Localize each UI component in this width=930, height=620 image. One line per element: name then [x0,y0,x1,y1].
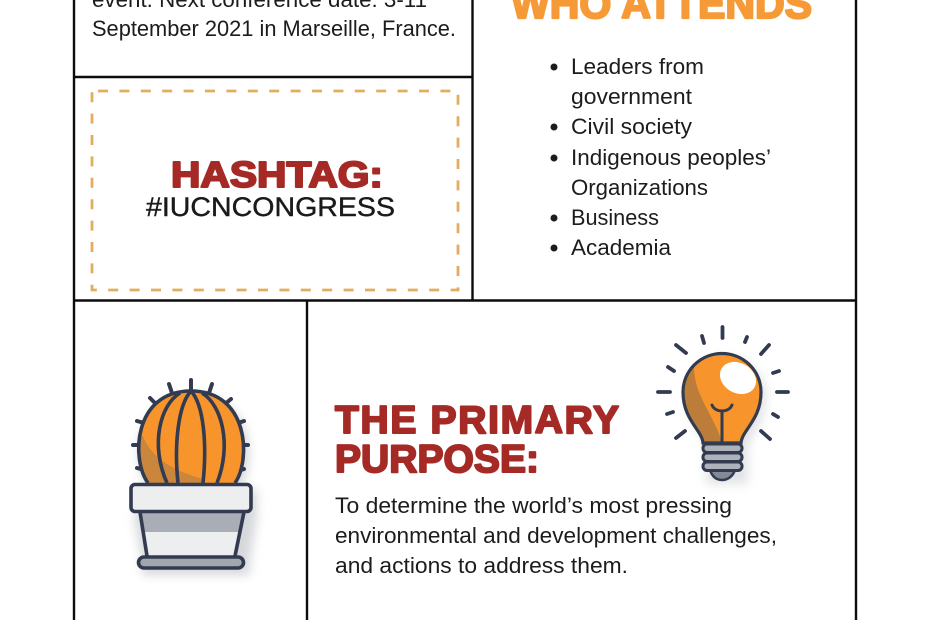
list: attendees: Business [571,205,659,230]
text block: purpose description: and actions to address them. [335,553,628,578]
heading: the primary purpose [335,399,619,481]
list: attendees: Leaders from [571,54,704,79]
text block: event date: September 2021 in Marseille, France. [92,16,456,41]
heading: hashtag: HASHTAG: [171,154,383,195]
text block: event date [92,0,456,41]
list: attendees: Organizations [571,175,708,200]
text block: purpose description [335,493,777,578]
icon: cactus [130,380,257,575]
text: hashtag value: #IUCNCONGRESS [146,192,395,222]
text block: purpose description: To determine the world’s most pressing [335,493,732,518]
list: attendees [550,54,771,260]
dashed frame [92,91,458,290]
icon: light bulb [658,327,788,484]
list: attendees: Academia [571,235,672,260]
heading: the primary purpose: PURPOSE: [335,438,539,481]
heading: the primary purpose: THE PRIMARY [335,399,619,442]
list: attendees: government [571,84,692,109]
text block: purpose description: environmental and development challenges, [335,523,777,548]
list: attendees: Civil society [571,114,692,139]
panel: hashtag [92,91,458,290]
list: attendees: Indigenous peoples’ [571,145,771,170]
